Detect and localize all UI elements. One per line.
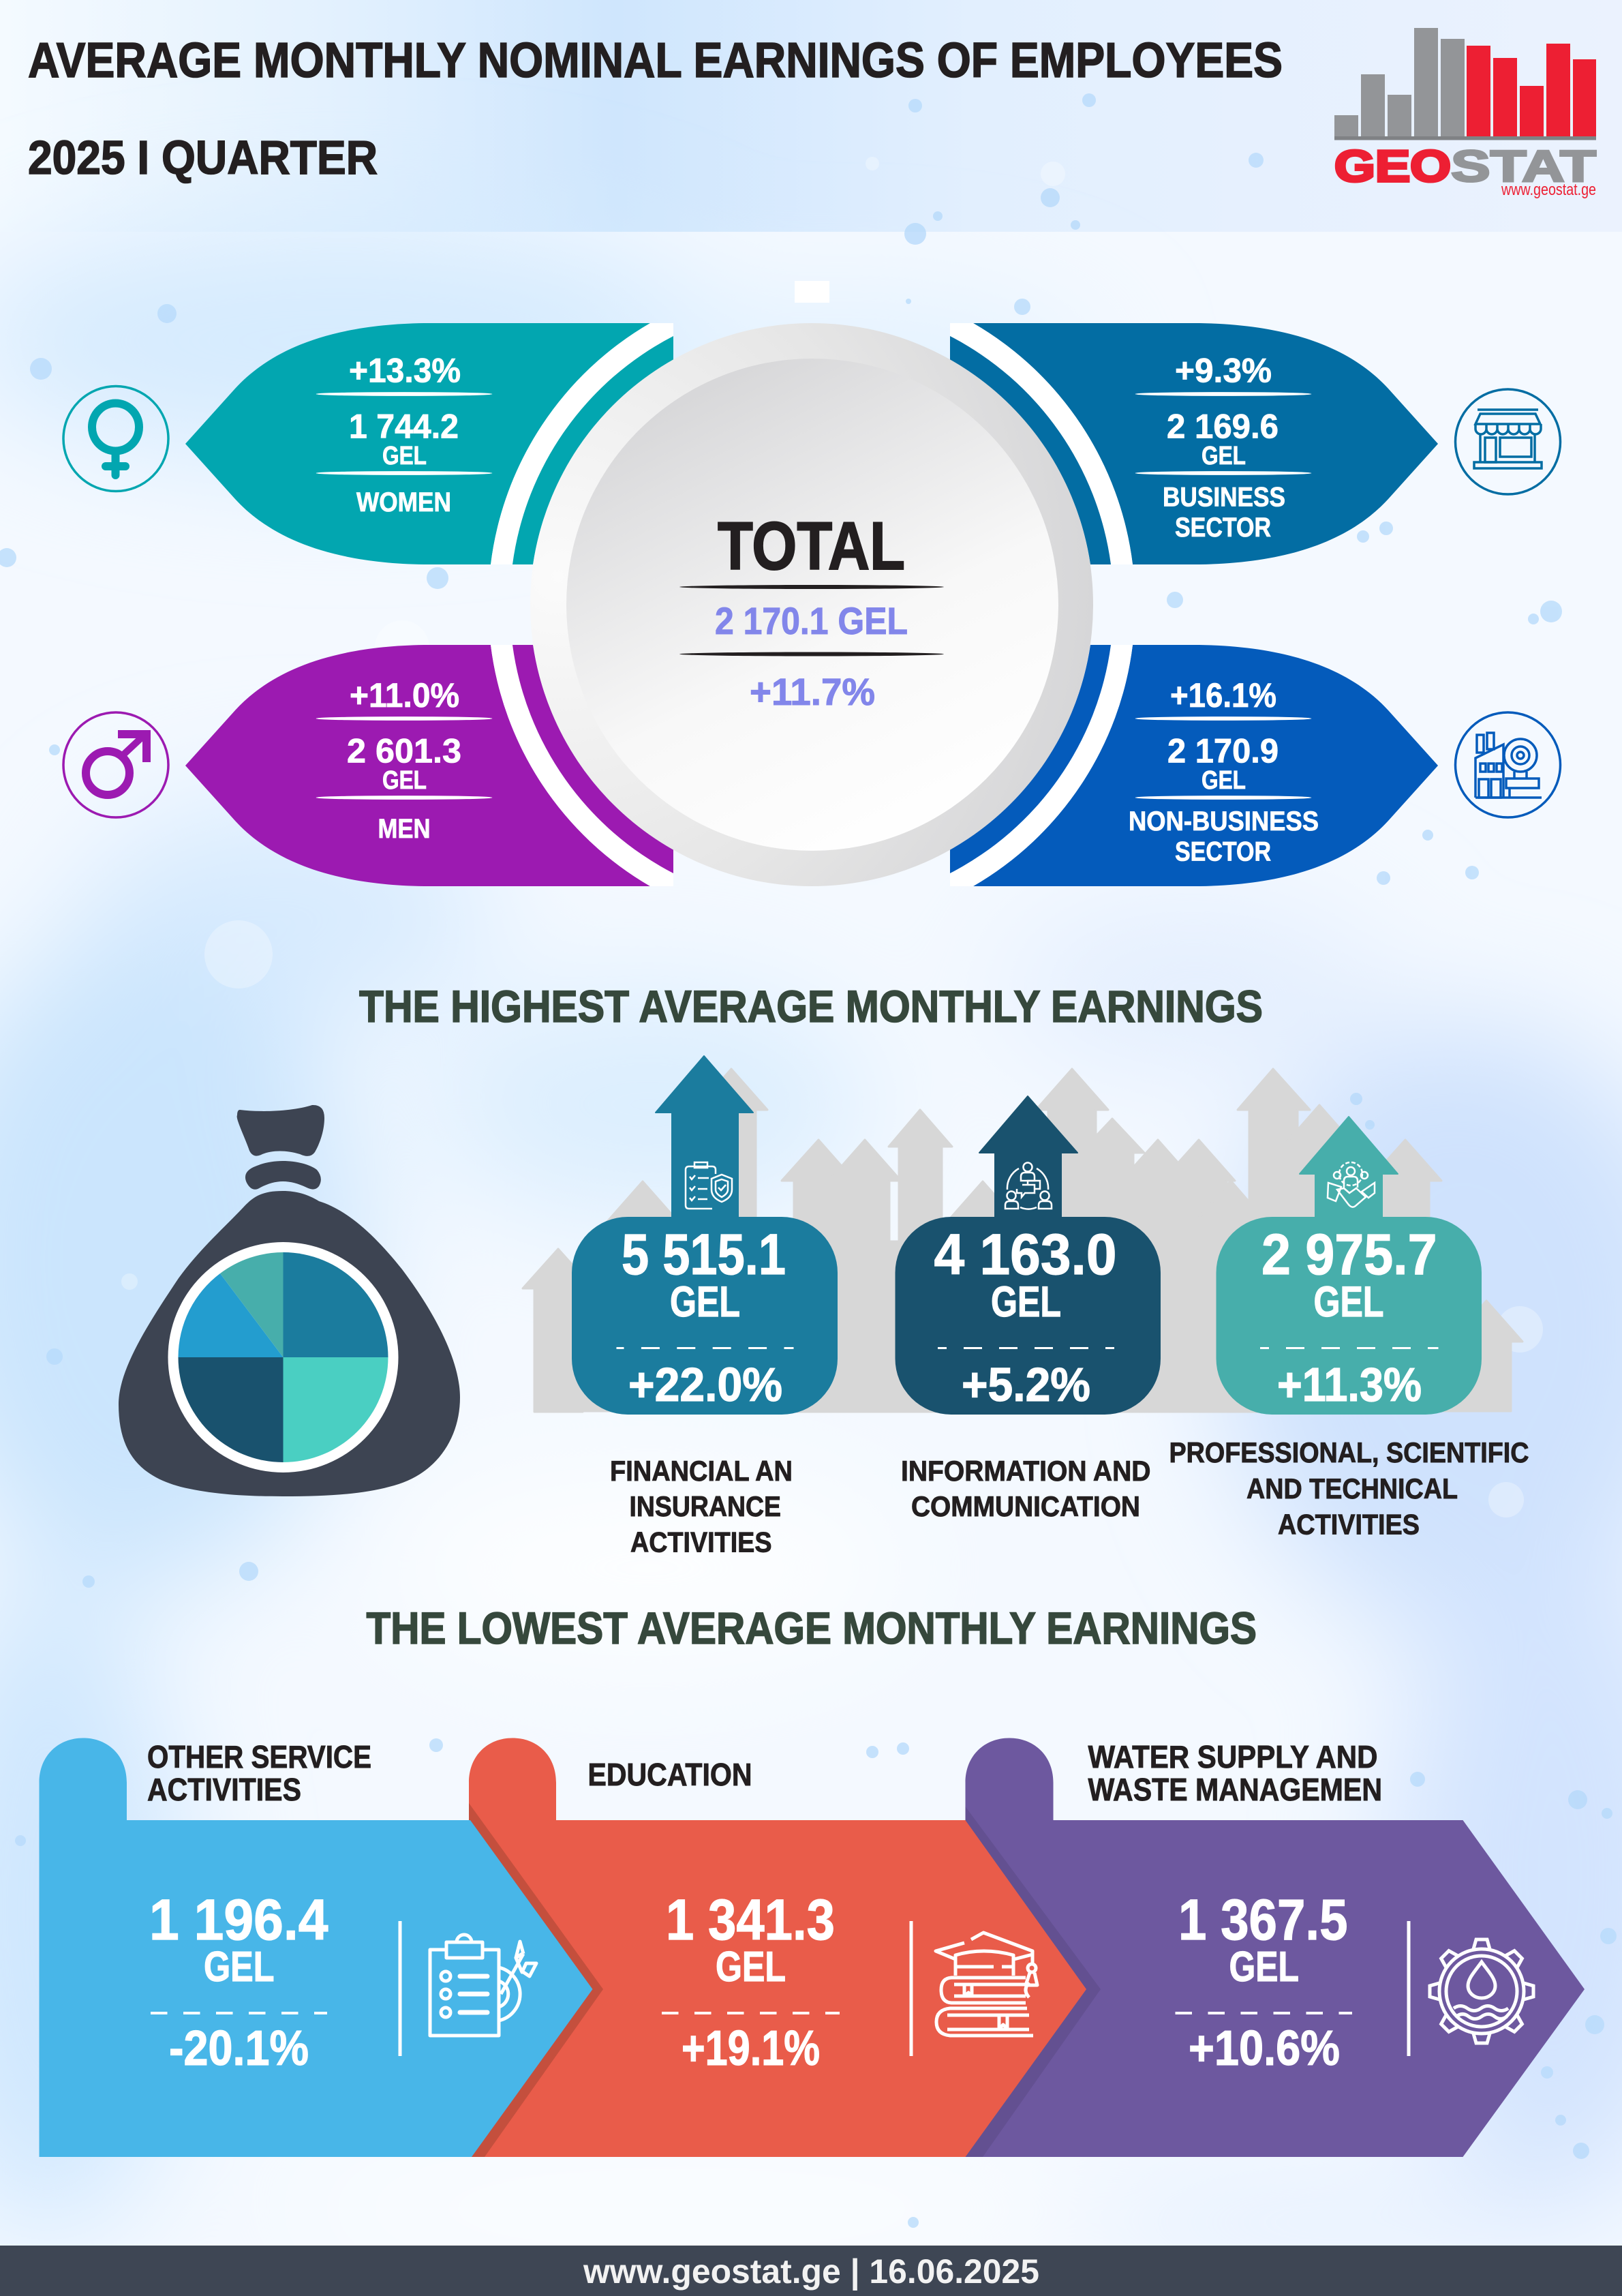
icon: handshake with gear: [1328, 1162, 1375, 1207]
panel: business sector: [950, 323, 1438, 564]
icon: people talking: [1005, 1163, 1052, 1209]
grey arrows background: [523, 1069, 1522, 1412]
panel: professional, scientific and technical: GEL: [1314, 1278, 1383, 1326]
label: water supply and waste management: WATER SUPPLY AND: [1088, 1739, 1378, 1774]
label: information and communication: COMMUNICATION: [911, 1490, 1140, 1522]
panel: non-business sector: [950, 645, 1438, 886]
icon: checklist with target: [430, 1935, 536, 2036]
panel: total circle: TOTAL: [718, 508, 905, 584]
panel: professional, scientific and technical: +11.3%: [1277, 1358, 1422, 1411]
panel: water supply and waste management: [965, 1738, 1585, 2157]
panel: non-business sector: 2 170.9: [1167, 732, 1279, 770]
panel: women: WOMEN: [356, 487, 451, 517]
label: financial and insurance: INSURANCE: [630, 1490, 781, 1522]
panel: total circle: +11.7%: [750, 670, 875, 713]
title: AVERAGE MONTHLY NOMINAL EARNINGS OF EMPLOYEES: [28, 33, 1283, 88]
panel: water supply and waste management: +10.6%: [1189, 2021, 1340, 2076]
panel: other service activities: GEL: [204, 1944, 274, 1991]
icon: female symbol: [63, 386, 168, 491]
panel: professional, scientific and technical: 2 975.7: [1261, 1222, 1437, 1286]
heading: lowest earnings: THE LOWEST AVERAGE MONTHLY EARNINGS: [367, 1603, 1257, 1653]
label: financial and insurance: ACTIVITIES: [630, 1526, 771, 1558]
logo: Geostat: STAT: [1451, 141, 1596, 191]
label: professional, scientific and technical: [1169, 1436, 1529, 1541]
panel: financial and insurance: GEL: [670, 1278, 740, 1326]
logo: Geostat: www.geostat.ge: [1501, 181, 1596, 199]
panel: men: GEL: [382, 766, 427, 795]
panel: men: +11.0%: [350, 676, 459, 714]
panel: non-business sector: GEL: [1202, 766, 1246, 795]
panel: education: +19.1%: [682, 2021, 820, 2076]
label: other service activities: [147, 1739, 371, 1807]
icon: clipboard with shield: [686, 1162, 732, 1209]
panel: business sector: GEL: [1202, 442, 1246, 470]
panel: non-business sector: SECTOR: [1175, 837, 1271, 867]
panel: professional, scientific and technical: [1216, 1117, 1482, 1415]
label: water supply and waste management: WASTE MANAGEMEN: [1088, 1772, 1382, 1807]
label: information and communication: [901, 1455, 1150, 1522]
panel: women: 1 744.2: [349, 408, 459, 446]
label: professional, scientific and technical: AND TECHNICAL: [1246, 1472, 1458, 1505]
panel: other service activities: [40, 1738, 593, 2157]
panel: financial and insurance: 5 515.1: [622, 1222, 786, 1286]
label: professional, scientific and technical: PROFESSIONAL, SCIENTIFIC: [1169, 1436, 1529, 1468]
panel: education: GEL: [716, 1944, 786, 1991]
panel: information and communication: [896, 1096, 1161, 1415]
footer: www.geostat.ge | 16.06.2025: [583, 2252, 1039, 2291]
panel: women: +13.3%: [349, 352, 461, 390]
icon: gear with water drop: [1430, 1939, 1533, 2043]
icon: male symbol: [63, 712, 168, 817]
label: other service activities: ACTIVITIES: [147, 1772, 301, 1807]
logo: Geostat: GEO: [1334, 141, 1451, 191]
panel: education: 1 341.3: [666, 1888, 835, 1952]
panel: women: GEL: [382, 442, 427, 470]
panel: total circle: [530, 323, 1093, 886]
panel: information and communication: GEL: [991, 1278, 1061, 1326]
panel: other service activities: -20.1%: [169, 2021, 309, 2076]
label: financial and insurance: FINANCIAL AN: [610, 1455, 793, 1487]
icon: graduation cap on books: [936, 1933, 1037, 2036]
panel: water supply and waste management: 1 367.5: [1178, 1888, 1348, 1952]
logo: Geostat: [1334, 28, 1596, 199]
label: financial and insurance: [610, 1455, 793, 1558]
icon: money bag with pie chart: [119, 1105, 460, 1496]
label: education: EDUCATION: [587, 1757, 752, 1792]
panel: business sector: BUSINESS: [1163, 483, 1285, 513]
icon: storefront: [1456, 389, 1561, 494]
panel: men: MEN: [378, 814, 431, 844]
label: other service activities: OTHER SERVICE: [147, 1739, 371, 1774]
panel: education: [469, 1738, 1086, 2157]
panel: business sector: SECTOR: [1175, 513, 1271, 543]
panel: men: 2 601.3: [347, 732, 461, 770]
panel: total circle: 2 170.1 GEL: [715, 599, 908, 642]
label: professional, scientific and technical: ACTIVITIES: [1278, 1508, 1420, 1541]
label: information and communication: INFORMATION AND: [901, 1455, 1150, 1487]
panel: non-business sector: +16.1%: [1170, 676, 1276, 714]
panel: information and communication: +5.2%: [962, 1358, 1090, 1411]
panel: business sector: +9.3%: [1175, 352, 1272, 390]
label: water supply and waste management: [1088, 1739, 1382, 1807]
panel: non-business sector: NON-BUSINESS: [1129, 806, 1319, 836]
panel: financial and insurance: [572, 1056, 838, 1415]
panel: women: [185, 323, 673, 564]
footer: [0, 2246, 1622, 2296]
panel: financial and insurance: +22.0%: [628, 1358, 782, 1411]
panel: business sector: 2 169.6: [1167, 408, 1279, 446]
subtitle: period: 2025 I QUARTER: [28, 131, 378, 184]
heading: highest earnings: THE HIGHEST AVERAGE MONTHLY EARNINGS: [359, 981, 1263, 1031]
icon: factory: [1456, 712, 1561, 817]
panel: men: [185, 645, 673, 886]
panel: other service activities: 1 196.4: [149, 1888, 328, 1952]
panel: information and communication: 4 163.0: [934, 1222, 1116, 1286]
panel: water supply and waste management: GEL: [1229, 1944, 1299, 1991]
